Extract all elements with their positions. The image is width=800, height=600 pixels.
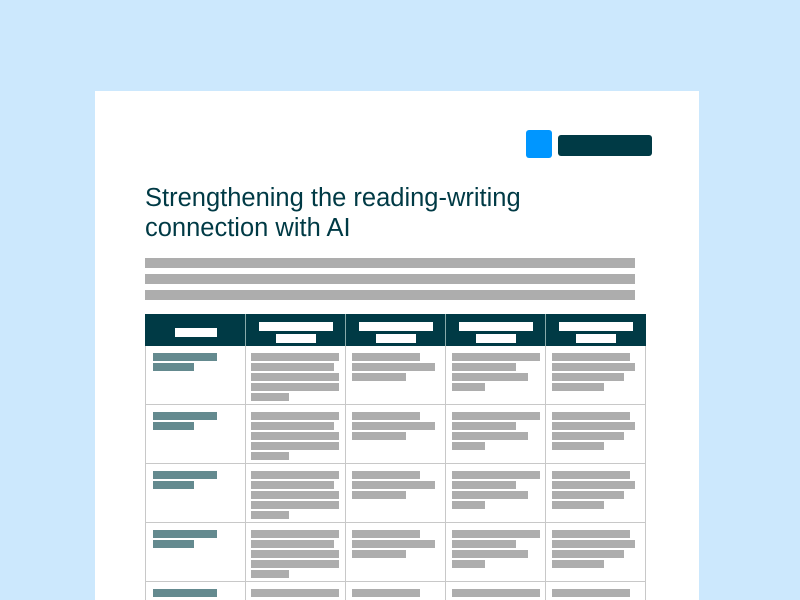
- icon: logo square: [526, 130, 552, 158]
- title: Strengthening the reading-writing connection with AI: [145, 184, 521, 242]
- card: [95, 91, 699, 600]
- logo: [526, 130, 652, 158]
- table body: [145, 346, 646, 600]
- table: [145, 314, 646, 600]
- logo wordmark bar: [558, 135, 652, 156]
- table rows: [146, 353, 645, 597]
- intro text block: [145, 258, 635, 300]
- table header: [145, 314, 646, 346]
